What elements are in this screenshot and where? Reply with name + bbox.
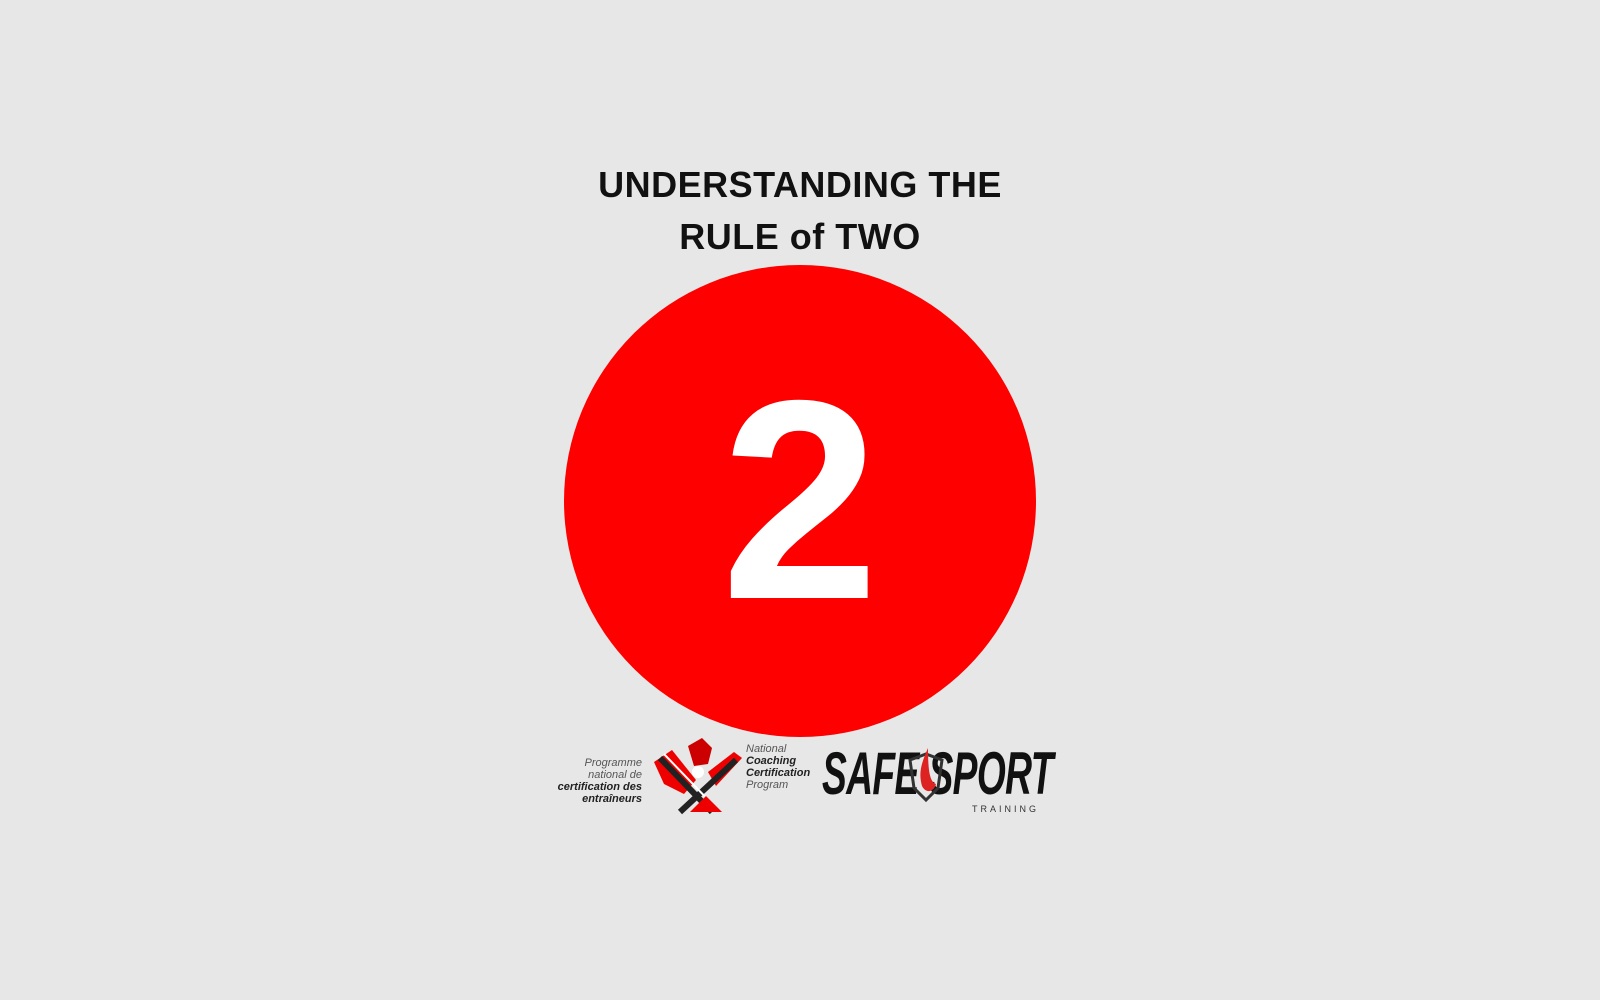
- text: english program name: [746, 743, 810, 791]
- icon: NCCP maple leaf logo: [654, 738, 742, 814]
- title: RULE of TWO: [679, 216, 921, 257]
- text: french program name: certification des: [558, 781, 642, 793]
- text: english program name: Certification: [746, 767, 810, 779]
- logos row: [558, 738, 1056, 814]
- text: english program name: National: [746, 743, 786, 755]
- text: french program name: entraîneurs: [582, 793, 642, 805]
- text: english program name: Program: [746, 779, 788, 791]
- text: SAFE SPORT: SAFE SPORT: [822, 740, 1053, 807]
- text: french program name: [558, 757, 642, 805]
- text: TRAINING: TRAINING: [972, 804, 1039, 814]
- text: english program name: Coaching: [746, 755, 796, 767]
- text: french program name: Programme: [585, 757, 642, 769]
- red circle with number 2: [564, 265, 1036, 737]
- icon: shield flame: [908, 748, 944, 802]
- safe sport logo: [822, 740, 1056, 814]
- text: french program name: national de: [588, 769, 642, 781]
- title: [598, 164, 1002, 257]
- number 2: 2: [721, 342, 879, 659]
- title: UNDERSTANDING THE: [598, 164, 1002, 205]
